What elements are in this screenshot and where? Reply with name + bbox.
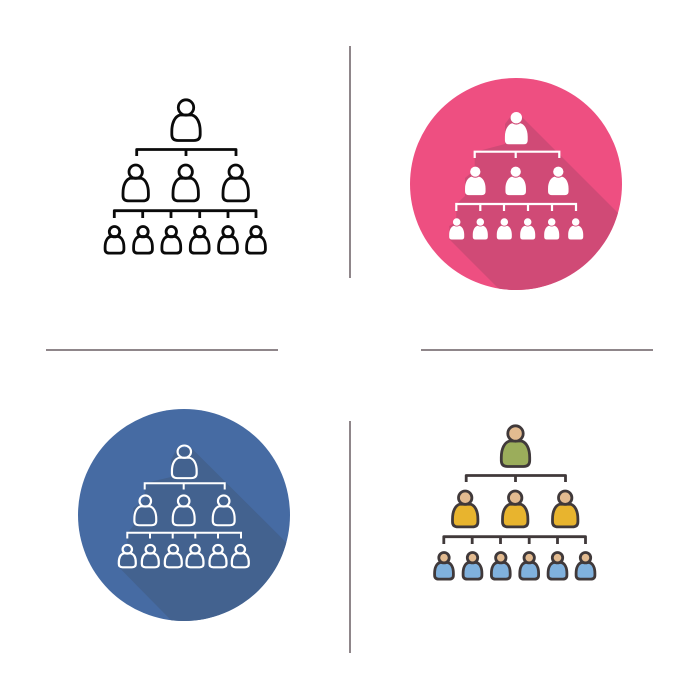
connector lines xyxy=(456,152,576,211)
divider: right horizontal xyxy=(421,349,653,351)
top level person xyxy=(172,446,197,478)
pink circle xyxy=(410,78,622,290)
bottom row of people xyxy=(119,545,249,567)
long shadow xyxy=(449,116,618,290)
long shadow xyxy=(118,448,286,621)
bottom row of people, blue xyxy=(435,552,595,579)
middle row of people, yellow xyxy=(452,491,578,527)
bottom row of people xyxy=(449,218,583,240)
panel: coloured hierarchy icon xyxy=(435,426,595,579)
divider: top vertical xyxy=(349,46,351,278)
panel: blue outline hierarchy icon xyxy=(78,409,290,621)
panel: black outline hierarchy icon xyxy=(105,100,265,253)
connector lines xyxy=(444,476,586,544)
panel: pink flat hierarchy icon xyxy=(410,78,622,290)
blue circle xyxy=(78,409,290,621)
middle row of people xyxy=(134,495,235,525)
top level person xyxy=(172,100,200,140)
connector lines xyxy=(127,483,241,538)
top level person, green xyxy=(501,426,530,466)
divider: bottom vertical xyxy=(349,421,351,653)
top level person xyxy=(505,112,528,144)
divider: left horizontal xyxy=(46,349,278,351)
middle row of people xyxy=(123,165,248,201)
bottom row of people xyxy=(105,226,265,253)
connector lines xyxy=(114,150,256,218)
middle row of people xyxy=(465,167,569,195)
